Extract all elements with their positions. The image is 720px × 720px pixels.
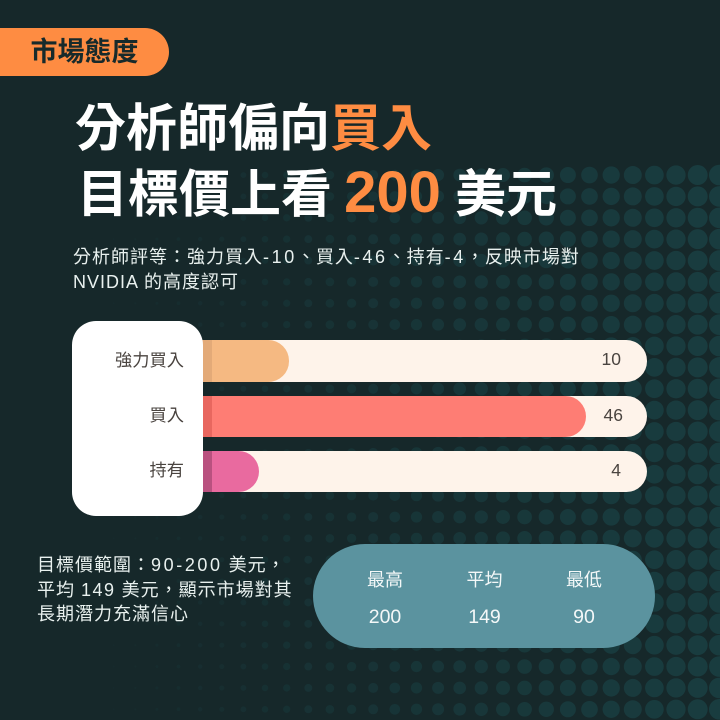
target price description: 目標價範圍：90-200 美元， [37, 555, 286, 575]
column: 平均: 平均 [466, 570, 502, 590]
bar accent: 強力買入 [190, 340, 212, 382]
tag text: 市場態度 [30, 36, 138, 66]
column: 平均: 149 [468, 606, 501, 628]
column: 最高: 最高 [367, 570, 403, 590]
column: 最高: 200 [369, 606, 401, 628]
bar accent: 買入 [190, 396, 212, 437]
target price description: 平均 149 美元，顯示市場對其 [37, 580, 293, 600]
bar fill: 強力買入 [190, 340, 289, 382]
bar fill: 買入 [190, 396, 586, 437]
subtitle: NVIDIA 的高度認可 [73, 272, 239, 292]
label card [72, 321, 203, 516]
bar: 持有 [190, 450, 647, 492]
subtitle: 分析師評等：強力買入-10、買入-46、持有-4，反映市場對 [73, 247, 580, 267]
bar chart [72, 321, 647, 516]
bar: 買入 [190, 396, 647, 437]
column: 平均 [466, 570, 502, 628]
value: 46: 46 [604, 404, 623, 424]
column: 最低: 90 [573, 606, 595, 628]
bar: 強力買入 [190, 340, 647, 382]
target price description: 長期潛力充滿信心 [37, 604, 189, 624]
subtitle [73, 247, 580, 292]
value: 4: 4 [611, 460, 621, 480]
target price description [37, 555, 293, 624]
bar accent: 持有 [190, 450, 212, 492]
bar fill: 持有 [190, 450, 259, 492]
title line 1: 分析師偏向買入 [75, 100, 432, 157]
label: 強力買入: 強力買入 [115, 350, 184, 370]
value: 10: 10 [602, 349, 621, 369]
column: 最低: 最低 [566, 570, 602, 590]
title line 2: 目標價上看 200 美元 [77, 160, 557, 225]
target price summary pill [313, 544, 655, 648]
section tag [0, 28, 169, 76]
label: 持有: 持有 [149, 460, 184, 480]
column: 最低 [566, 570, 602, 628]
label: 買入: 買入 [149, 405, 184, 425]
column: 最高 [367, 570, 403, 628]
